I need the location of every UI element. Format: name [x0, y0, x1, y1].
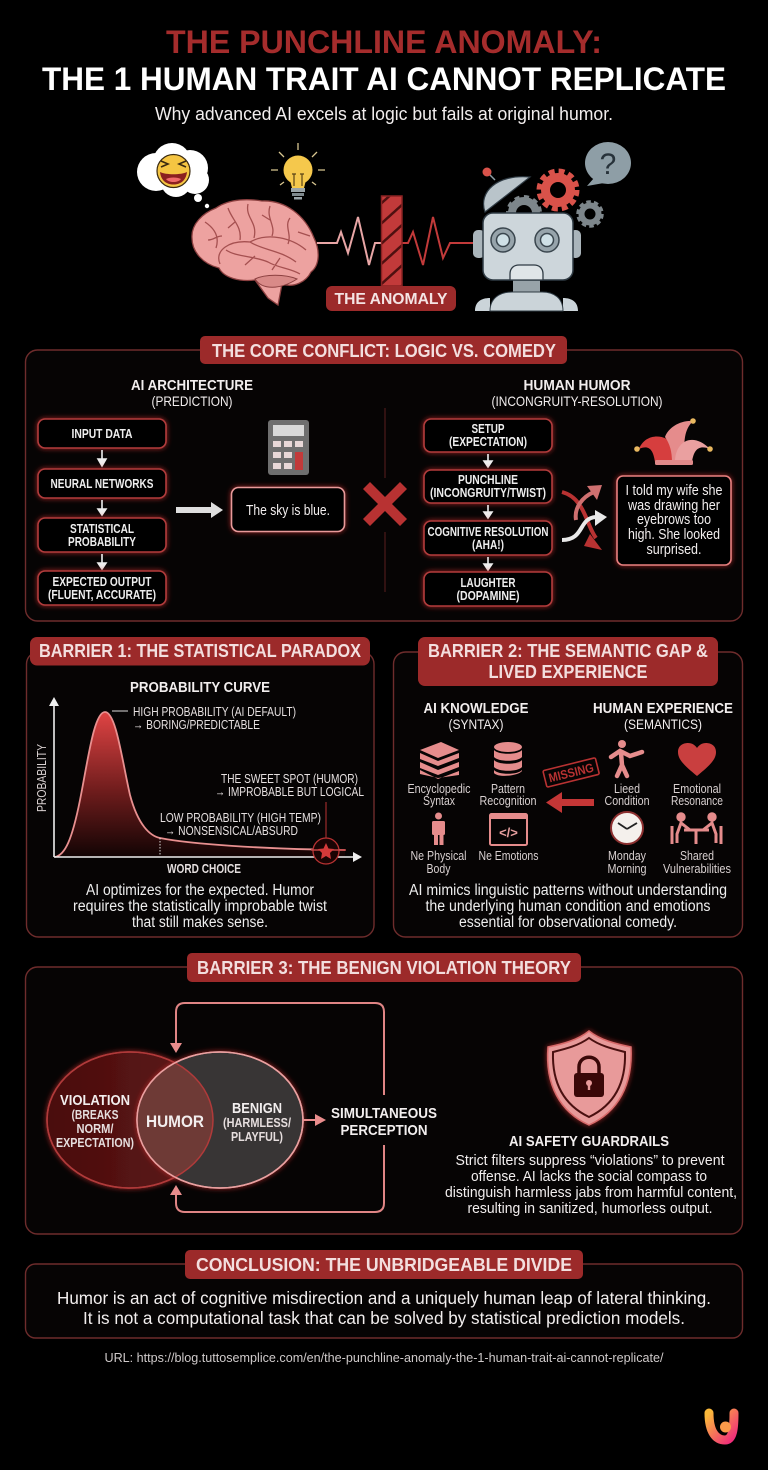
joke box [617, 476, 731, 565]
AI architecture column heading [131, 378, 253, 409]
human flow: punchline: PUNCHLINE [458, 473, 518, 487]
question bubble: ? [600, 148, 616, 181]
No Emotions label: Ne Emotions [478, 849, 538, 863]
Monday Morning label: Morning [608, 862, 647, 876]
anomaly badge [326, 286, 456, 311]
barrier 1 heading [30, 637, 370, 666]
simultaneous perception label: PERCEPTION [340, 1122, 428, 1139]
violation label [56, 1093, 134, 1150]
high probability callout: → BORING/PREDICTABLE [133, 718, 260, 732]
icon: shared table [672, 814, 721, 844]
violation label: VIOLATION [60, 1093, 130, 1109]
barrier 1 explanation [73, 882, 328, 931]
feedback loop arrows [170, 1003, 384, 1212]
AI flow: statistical probability: STATISTICAL [70, 522, 134, 536]
No Physical Body label [410, 849, 466, 876]
arrow [484, 557, 492, 570]
icon: no physical body [432, 812, 445, 845]
guardrails body: offense. AI lacks the social compass to [471, 1168, 707, 1185]
AI knowledge heading: AI KNOWLEDGE [424, 701, 529, 717]
AI architecture column heading: (PREDICTION) [152, 393, 232, 409]
dotted marker [159, 838, 161, 856]
arrow to sentence [176, 502, 223, 518]
title: THE PUNCHLINE ANOMALY: [166, 24, 602, 60]
overlap [138, 1064, 212, 1176]
barrier 1 heading: BARRIER 1: THE STATISTICAL PARADOX [39, 640, 362, 661]
arrow [98, 500, 106, 515]
AI knowledge heading: (SYNTAX) [448, 716, 504, 732]
AI flow: neural networks: NEURAL NETWORKS [50, 477, 154, 491]
icon: thought cloud with laughing emoji [137, 143, 209, 208]
conclusion text: Humor is an act of cognitive misdirection and a uniquely human leap of lateral thinking. [57, 1288, 711, 1308]
human humor column heading: HUMAN HUMOR [524, 378, 631, 394]
No Physical Body label: Body [426, 862, 451, 876]
barrier 2 explanation [409, 882, 727, 931]
low probability callout: LOW PROBABILITY (HIGH TEMP) [160, 811, 321, 825]
core conflict heading: THE CORE CONFLICT: LOGIC VS. COMEDY [212, 340, 557, 361]
guardrails heading: AI SAFETY GUARDRAILS [509, 1133, 669, 1150]
icon: calculator [268, 420, 309, 475]
low probability callout [160, 811, 321, 838]
human flow: setup [424, 419, 552, 452]
sentence box: the sky is blue [232, 488, 344, 532]
red arrow missing [546, 792, 594, 813]
human flow: laughter: LAUGHTER [460, 576, 516, 590]
joke box: eyebrows too [637, 512, 711, 528]
violation label: EXPECTATION) [56, 1135, 134, 1150]
human flow: cognitive resolution [424, 521, 552, 555]
arrow [98, 554, 106, 569]
human experience heading [593, 701, 733, 732]
humor label: HUMOR [146, 1112, 204, 1131]
Lived Condition label: Lieed [614, 782, 640, 796]
anomaly badge: THE ANOMALY [334, 291, 448, 308]
human flow: laughter [424, 572, 552, 606]
barrier 2 explanation: AI mimics linguistic patterns without understanding [409, 882, 727, 899]
Pattern Recognition label: Recognition [480, 794, 537, 808]
violation circle [47, 1052, 213, 1188]
human flow: laughter: (DOPAMINE) [456, 589, 520, 603]
panel: barrier 2 [394, 637, 742, 937]
probability curve chart [35, 697, 364, 876]
icon: books [420, 742, 459, 779]
sweet spot callout: → IMPROBABLE BUT LOGICAL [215, 785, 364, 799]
subtitle: Why advanced AI excels at logic but fails at original humor. [155, 104, 613, 124]
icon: code window [490, 814, 527, 845]
arrow [98, 450, 106, 466]
AI architecture column heading: AI ARCHITECTURE [131, 378, 253, 394]
icon: light bulb [271, 143, 325, 200]
human flow: setup: SETUP [472, 422, 504, 436]
Lived Condition label [604, 782, 650, 808]
conclusion text: It is not a computational task that can be solved by statistical prediction models. [83, 1308, 685, 1328]
conclusion heading [185, 1250, 583, 1279]
Shared Vulnerabilities label: Vulnerabilities [663, 862, 731, 876]
human flow: setup: (EXPECTATION) [449, 435, 527, 449]
hero illustration [137, 142, 631, 311]
panel: core conflict [26, 336, 742, 621]
Monday Morning label [608, 849, 647, 876]
joke box: was drawing her [627, 498, 720, 514]
signal wave left [317, 217, 381, 265]
guardrails body: distinguish harmless jabs from harmful content, [445, 1184, 737, 1201]
icon: database [494, 742, 522, 776]
panel: barrier 3 [26, 953, 742, 1234]
title [42, 24, 726, 97]
icon: falling person [611, 740, 642, 776]
source url: URL: https://blog.tuttosemplice.com/en/the-punchline-anomaly-the-1-human-trait-ai-cannot-replicate/ [104, 1351, 664, 1365]
Emotional Resonance label: Resonance [671, 794, 723, 808]
venn diagram [47, 1052, 303, 1188]
human humor column heading [492, 378, 662, 409]
benign label: PLAYFUL) [231, 1129, 283, 1144]
sweet spot callout: THE SWEET SPOT (HUMOR) [221, 772, 358, 786]
Shared Vulnerabilities label [663, 849, 731, 876]
icon: code window: </> [499, 825, 518, 840]
barrier 3 heading [187, 953, 581, 982]
missing stamp: MISSING [547, 761, 595, 785]
Pattern Recognition label: Pattern [491, 782, 525, 796]
sweet spot callout [215, 772, 364, 838]
joke box: high. She looked [628, 527, 720, 543]
AI flow: input data: INPUT DATA [72, 427, 132, 441]
benign circle [137, 1052, 303, 1188]
icon: robot [473, 142, 631, 311]
Shared Vulnerabilities label: Shared [680, 849, 714, 863]
barrier 1 explanation: that still makes sense. [132, 914, 268, 931]
violation label: (BREAKS [72, 1107, 119, 1122]
benign label: (HARMLESS/ [223, 1115, 291, 1130]
question bubble [585, 142, 631, 186]
curve line [55, 712, 345, 857]
icon: red cross [363, 482, 407, 526]
AI flow: expected output: (FLUENT, ACCURATE) [48, 588, 156, 602]
panel: barrier 1 [26, 637, 374, 937]
AI flow: expected output: EXPECTED OUTPUT [52, 575, 152, 589]
AI knowledge heading [424, 701, 529, 732]
Encyclopedic Syntax label: Encyclopedic [408, 782, 470, 796]
Encyclopedic Syntax label: Syntax [423, 794, 456, 808]
high probability callout [112, 705, 296, 732]
chart heading: PROBABILITY CURVE [130, 680, 270, 696]
human experience heading: HUMAN EXPERIENCE [593, 701, 733, 717]
sentence box: the sky is blue: The sky is blue. [246, 503, 330, 519]
human flow: punchline [424, 470, 552, 503]
simultaneous perception label: SIMULTANEOUS [331, 1105, 437, 1122]
guardrails body: Strict filters suppress “violations” to prevent [456, 1152, 725, 1169]
Monday Morning label: Monday [608, 849, 647, 863]
icon: brain [192, 200, 318, 305]
benign label: BENIGN [232, 1101, 282, 1117]
barrier 2 heading: BARRIER 2: THE SEMANTIC GAP & [428, 640, 708, 661]
human flow: cognitive resolution: (AHA!) [472, 538, 504, 552]
arrow [484, 505, 492, 518]
violation label: NORM/ [76, 1121, 114, 1136]
Emotional Resonance label: Emotional [673, 782, 721, 796]
axes [54, 705, 355, 857]
barrier 3 heading: BARRIER 3: THE BENIGN VIOLATION THEORY [197, 957, 572, 978]
low probability callout: → NONSENSICAL/ABSURD [165, 824, 298, 838]
barrier 2 heading [418, 637, 718, 686]
Lived Condition label: Condition [604, 794, 650, 808]
human flow: cognitive resolution: COGNITIVE RESOLUTION [428, 525, 548, 539]
simultaneous perception label [331, 1105, 437, 1139]
title: THE 1 HUMAN TRAIT AI CANNOT REPLICATE [42, 61, 726, 97]
AI flow: statistical probability [38, 518, 166, 552]
Encyclopedic Syntax label [408, 782, 470, 808]
y axis label: PROBABILITY [35, 743, 49, 812]
AI flow: neural networks [38, 469, 166, 498]
joke box: I told my wife she [626, 483, 722, 499]
conclusion heading: CONCLUSION: THE UNBRIDGEABLE DIVIDE [196, 1254, 572, 1275]
icon: twisting arrows [562, 485, 607, 550]
human flow: punchline: (INCONGRUITY/TWIST) [430, 486, 546, 500]
curve fill [55, 712, 345, 857]
arrow to simultaneous perception [303, 1114, 326, 1126]
center divider [384, 408, 386, 592]
barrier 1 explanation: requires the statistically improbable twist [73, 898, 328, 915]
barrier 1 explanation: AI optimizes for the expected. Humor [86, 882, 314, 899]
high probability callout: HIGH PROBABILITY (AI DEFAULT) [133, 705, 296, 719]
icon: jester hat [634, 418, 713, 465]
icon: heart [678, 743, 716, 776]
x axis label: WORD CHOICE [167, 862, 241, 876]
human humor column heading: (INCONGRUITY-RESOLUTION) [492, 393, 662, 409]
logo [709, 1413, 734, 1440]
human experience heading: (SEMANTICS) [624, 716, 702, 732]
sweet spot star [311, 838, 346, 864]
barrier 2 heading: LIVED EXPERIENCE [488, 661, 648, 682]
Emotional Resonance label [671, 782, 723, 808]
core conflict heading [200, 336, 567, 364]
barrier 2 explanation: the underlying human condition and emotions [426, 898, 711, 915]
icon: shield with padlock [548, 1031, 631, 1125]
Pattern Recognition label [480, 782, 537, 808]
anomaly striped bar [382, 196, 402, 286]
arrow [484, 454, 492, 467]
barrier 2 explanation: essential for observational comedy. [459, 914, 677, 931]
guardrails body [445, 1152, 737, 1217]
AI flow: statistical probability: PROBABILITY [68, 535, 137, 549]
No Physical Body label: Ne Physical [410, 849, 466, 863]
axis arrowheads [49, 697, 362, 862]
panel: conclusion [26, 1250, 742, 1338]
conclusion text [57, 1288, 711, 1328]
icon: clock [611, 812, 643, 844]
joke box: surprised. [646, 542, 702, 558]
benign label [223, 1101, 291, 1144]
guardrails body: resulting in sanitized, humorless output. [468, 1200, 712, 1217]
AI flow: input data [38, 419, 166, 448]
signal wave right [402, 217, 473, 265]
AI flow: expected output [38, 571, 166, 605]
